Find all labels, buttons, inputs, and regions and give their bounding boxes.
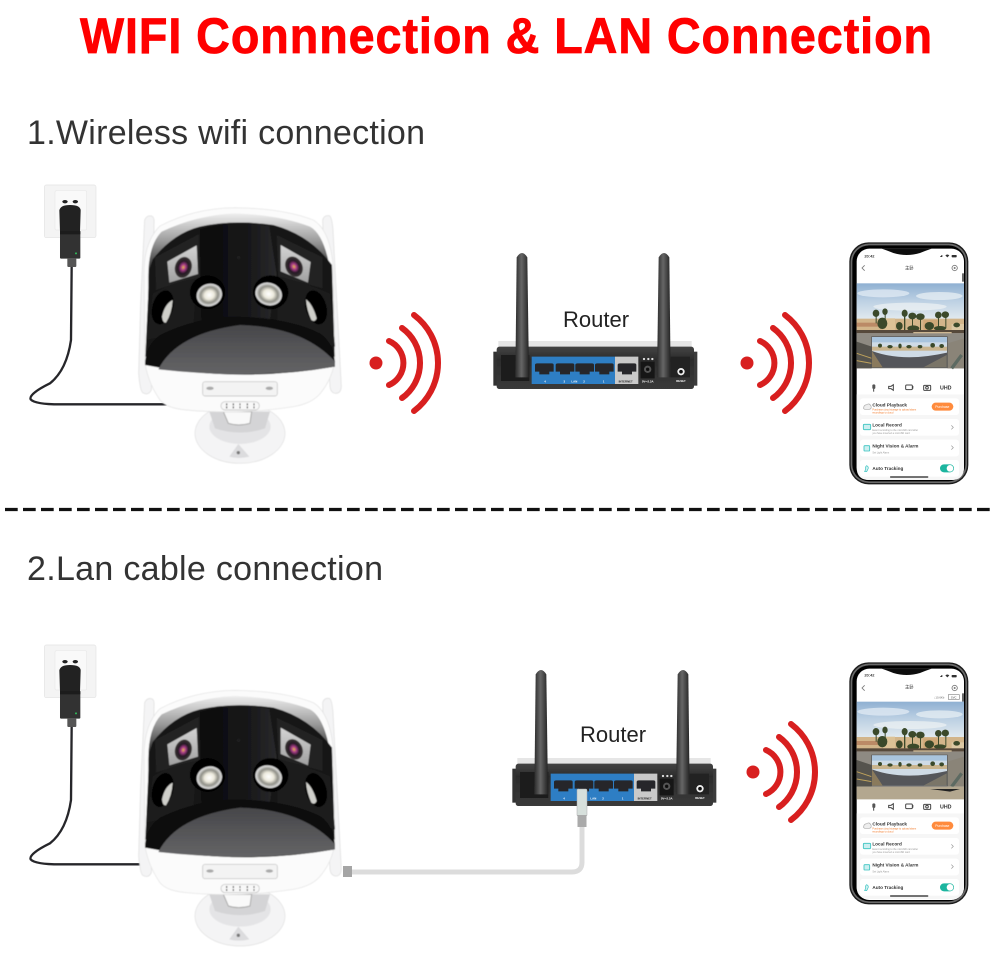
phone 1 with app screen: Auto Tracking — [872, 466, 904, 471]
router 1: RESET — [676, 379, 686, 383]
wifi signal icon: router to phone — [740, 315, 809, 411]
heading: lan cable connection: 2.Lan cable connection — [27, 550, 383, 588]
phone 2 with app screen: Local Record — [872, 842, 902, 847]
phone 2 with app screen: you have inserted a microSD card — [872, 851, 910, 854]
router 1: 2 — [583, 380, 585, 384]
router 1: LAN — [571, 380, 577, 384]
phone 2 with app screen: recordings to cloud — [872, 830, 894, 833]
router 2 — [512, 670, 716, 806]
phone 1 with app screen: Night Vision & Alarm — [872, 443, 918, 448]
router 2 label: Router — [580, 722, 646, 747]
router 1: 3 — [564, 380, 566, 384]
title: WIFI Connnection & LAN Connection — [80, 8, 933, 64]
divider: dashed line — [5, 508, 990, 511]
phone 1 with app screen — [849, 242, 968, 484]
ethernet cable with connectors — [343, 826, 582, 877]
router 1 — [493, 253, 697, 389]
phone 1 with app screen: Set Light Alarm — [872, 451, 889, 454]
phone 1 with app screen: 20:42 — [864, 253, 875, 258]
router 2: 3 — [583, 797, 585, 801]
phone 1 with app screen: Event recording to the microSD card after — [872, 429, 918, 432]
phone 2 with app screen: Event recording to the microSD card after — [872, 848, 918, 851]
phone 1 with app screen: Cloud Playback — [872, 402, 907, 407]
router 1 label: Router — [563, 307, 629, 332]
phone 1 with app screen: you have inserted a microSD card — [872, 432, 910, 435]
phone 2 with app screen: Purchase cloud storage to upload alarm — [872, 827, 916, 830]
phone 2 with app screen: Set Light Alarm — [872, 870, 889, 873]
phone 2 with app screen: Night Vision & Alarm — [872, 862, 918, 867]
camera 2 — [139, 690, 341, 946]
router 2: 4 — [563, 797, 565, 801]
phone 1 with app screen: Purchase cloud storage to upload alarm — [872, 408, 916, 411]
phone 1 with app screen: UHD — [940, 386, 952, 392]
phone 1 with app screen: Purchase — [935, 405, 950, 409]
router 1: INTERNET — [619, 380, 633, 384]
phone 2 with app screen: Purchase — [935, 824, 950, 828]
phone 2 with app screen: ↓10.6Kb — [934, 695, 945, 699]
ethernet plug in router — [577, 789, 587, 827]
wall plug and power cable 1 — [30, 185, 167, 404]
router 2: LAN — [590, 797, 596, 801]
phone 2 with app screen — [849, 662, 968, 904]
phone 2 with app screen: 主卧 — [905, 684, 914, 691]
router 2: 1 — [622, 797, 624, 801]
heading: wireless wifi connection: 1.Wireless wifi connection — [27, 114, 425, 152]
router 2: 5V⎓2.3A — [661, 797, 673, 801]
phone 2 with app screen: Auto Tracking — [872, 885, 904, 890]
phone 1 with app screen: recordings to cloud — [872, 411, 894, 414]
router 1: 4 — [544, 380, 546, 384]
router 2: 2 — [602, 797, 604, 801]
router 1: 1 — [603, 380, 605, 384]
router 2: RESET — [695, 796, 705, 800]
phone 1 with app screen: 主卧 — [905, 264, 914, 271]
phone 1 with app screen: Local Record — [872, 423, 902, 428]
camera 1 — [139, 208, 341, 463]
router 1: 5V⎓2.3A — [642, 380, 654, 384]
phone 2 with app screen: 20:42 — [864, 673, 875, 678]
phone 2 with app screen: SVC — [951, 695, 956, 699]
wifi signal icon: router to phone — [746, 724, 815, 820]
phone 2 with app screen: Cloud Playback — [872, 821, 907, 826]
wall plug and power cable 2 — [30, 645, 167, 864]
router 2: INTERNET — [638, 797, 652, 801]
phone 2 with app screen: UHD — [940, 805, 952, 811]
wifi signal icon: camera to router — [370, 315, 438, 411]
